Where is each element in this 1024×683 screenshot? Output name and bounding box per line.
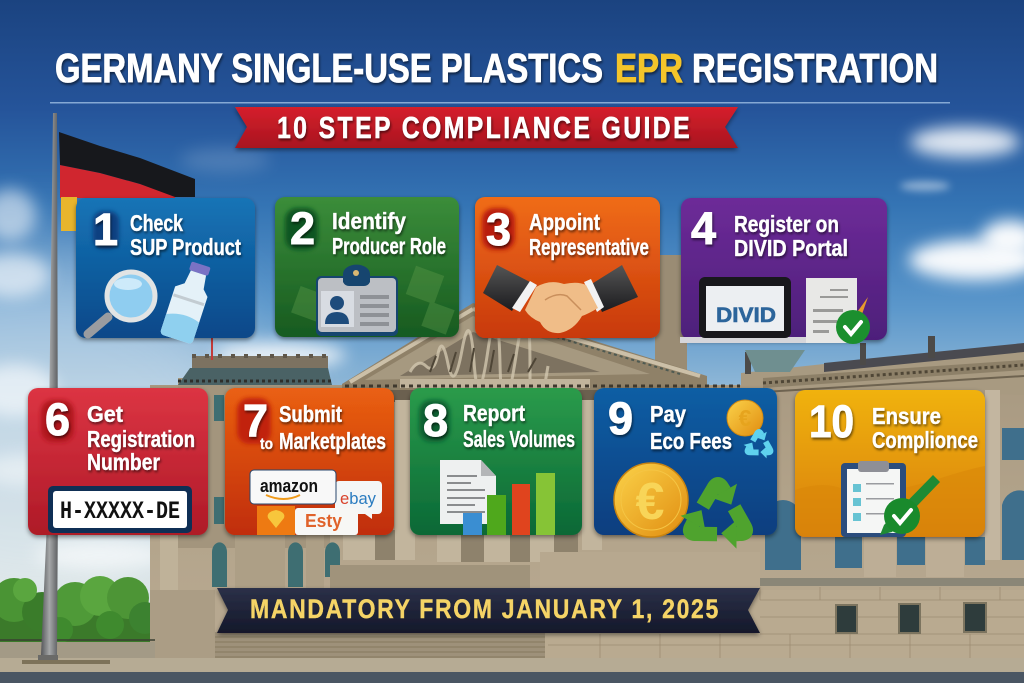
card 4: Register on DIVID Portal: 4 (691, 203, 716, 254)
card 9: Pay Eco Fees (594, 388, 777, 549)
card 6: Get Registration Number (28, 388, 208, 535)
card 3: Appoint Representative (475, 197, 660, 338)
card 6: Get Registration Number: Get (87, 401, 123, 427)
entablature (400, 379, 590, 388)
card 8: Report Sales Volumes (410, 388, 582, 535)
card 7: Submit to Marketplates: to (260, 436, 273, 453)
card 2: Identify Producer Role (275, 197, 459, 337)
card 7: Submit to Marketplates: 7 (243, 395, 268, 446)
string course (760, 578, 1024, 586)
title: GERMANY SINGLE-USE PLASTICS (55, 45, 603, 91)
icon: large euro coin: € (636, 473, 664, 531)
piers (985, 390, 1000, 560)
registration number plate: H-XXXXX-DE (60, 497, 180, 526)
card 6: Get Registration Number: 6 (45, 394, 70, 445)
icon: tablet with DIVID portal (680, 277, 810, 343)
card 9: Pay Eco Fees: Eco Fees (650, 428, 732, 454)
card 8: Report Sales Volumes: Sales Volumes (463, 426, 575, 452)
card 4: Register on DIVID Portal: Register on (734, 211, 839, 237)
logo tile: amazon: amazon (260, 476, 318, 496)
card 10: Ensure Complionce: Ensure (872, 403, 941, 429)
card 1: Check SUP Product: 1 (93, 204, 118, 255)
bar chart (463, 473, 555, 535)
icon: pencil and check badge (880, 475, 940, 535)
logo tile: ebay: ebay (340, 489, 376, 508)
card 3: Appoint Representative: Appoint (529, 209, 600, 235)
lower windows (836, 603, 986, 633)
card 10: Ensure Complionce (795, 390, 985, 537)
icon: ID badge (316, 265, 398, 336)
German flag (59, 132, 195, 231)
upper steps (330, 565, 530, 590)
columns (343, 400, 602, 562)
Reichstag building (0, 255, 1024, 660)
title rule (50, 102, 950, 104)
right windows upper (765, 428, 1024, 570)
logo tile: ebay (335, 481, 382, 519)
card 3: Appoint Representative: 3 (486, 204, 511, 255)
card 6: Get Registration Number: Registration (87, 426, 195, 452)
pediment sculpture texture (410, 314, 548, 421)
title: REGISTRATION (692, 45, 938, 91)
card 4: Register on DIVID Portal: DIVID Portal (734, 235, 848, 261)
base stairs (150, 590, 215, 660)
main wall (150, 385, 1024, 660)
flag pole (22, 113, 110, 664)
trees (0, 576, 161, 648)
tower behind cards (655, 255, 687, 385)
subtitle ribbon: 10 STEP COMPLIANCE GUIDE (277, 110, 692, 145)
registration number plate (48, 486, 192, 533)
icon: document (440, 460, 496, 524)
icon: small recycle (744, 432, 774, 458)
logo tile: amazon (250, 470, 336, 504)
card 2: Identify Producer Role: 2 (290, 203, 315, 254)
card 9: Pay Eco Fees: Pay (650, 401, 686, 427)
card 8: Report Sales Volumes: Report (463, 400, 525, 426)
card 2: Identify Producer Role: Identify (332, 208, 406, 234)
logo tile: Esty (295, 508, 358, 535)
icon: small coin: € (739, 405, 752, 431)
bottom banner: mandatory date: MANDATORY FROM JANUARY 1, 2025 (250, 594, 720, 624)
icon: document with check badge (806, 278, 870, 344)
card 1: Check SUP Product: SUP Product (130, 234, 241, 260)
left tower (178, 378, 330, 548)
icon: tablet with DIVID portal: DIVID (716, 304, 776, 327)
logo tile: shell (257, 506, 295, 535)
card 9: Pay Eco Fees: 9 (608, 393, 633, 444)
icon: handshake (483, 265, 638, 333)
icon: magnifying glass (88, 272, 155, 334)
card 10: Ensure Complionce: Complionce (872, 427, 978, 453)
icon: clipboard checklist (841, 461, 906, 537)
left windows (212, 395, 340, 587)
card 3: Appoint Representative: Representative (529, 234, 649, 260)
card 1: Check SUP Product: Check (130, 210, 183, 236)
card 7: Submit to Marketplates: Marketplates (279, 428, 386, 454)
card 7: Submit to Marketplates (225, 388, 394, 535)
title: EPR (615, 45, 683, 91)
pediment (342, 303, 707, 392)
card 2: Identify Producer Role: Producer Role (332, 233, 446, 259)
card 1: Check SUP Product (76, 198, 255, 344)
card 8: Report Sales Volumes: 8 (423, 395, 448, 446)
card 7: Submit to Marketplates: Submit (279, 401, 342, 427)
logo tile: Esty: Esty (305, 511, 342, 531)
bottom banner: mandatory date (217, 588, 760, 633)
icon: large euro coin (614, 463, 688, 537)
icon: water bottle (160, 259, 216, 344)
icon: large recycle (681, 484, 754, 549)
ground and road (0, 658, 1024, 683)
card 6: Get Registration Number: Number (87, 449, 160, 475)
card 10: Ensure Complionce: 10 (809, 396, 854, 447)
icon: small coin (727, 400, 763, 436)
balustrade (0, 642, 155, 660)
card 4: Register on DIVID Portal (680, 198, 887, 344)
clouds (0, 127, 1024, 569)
